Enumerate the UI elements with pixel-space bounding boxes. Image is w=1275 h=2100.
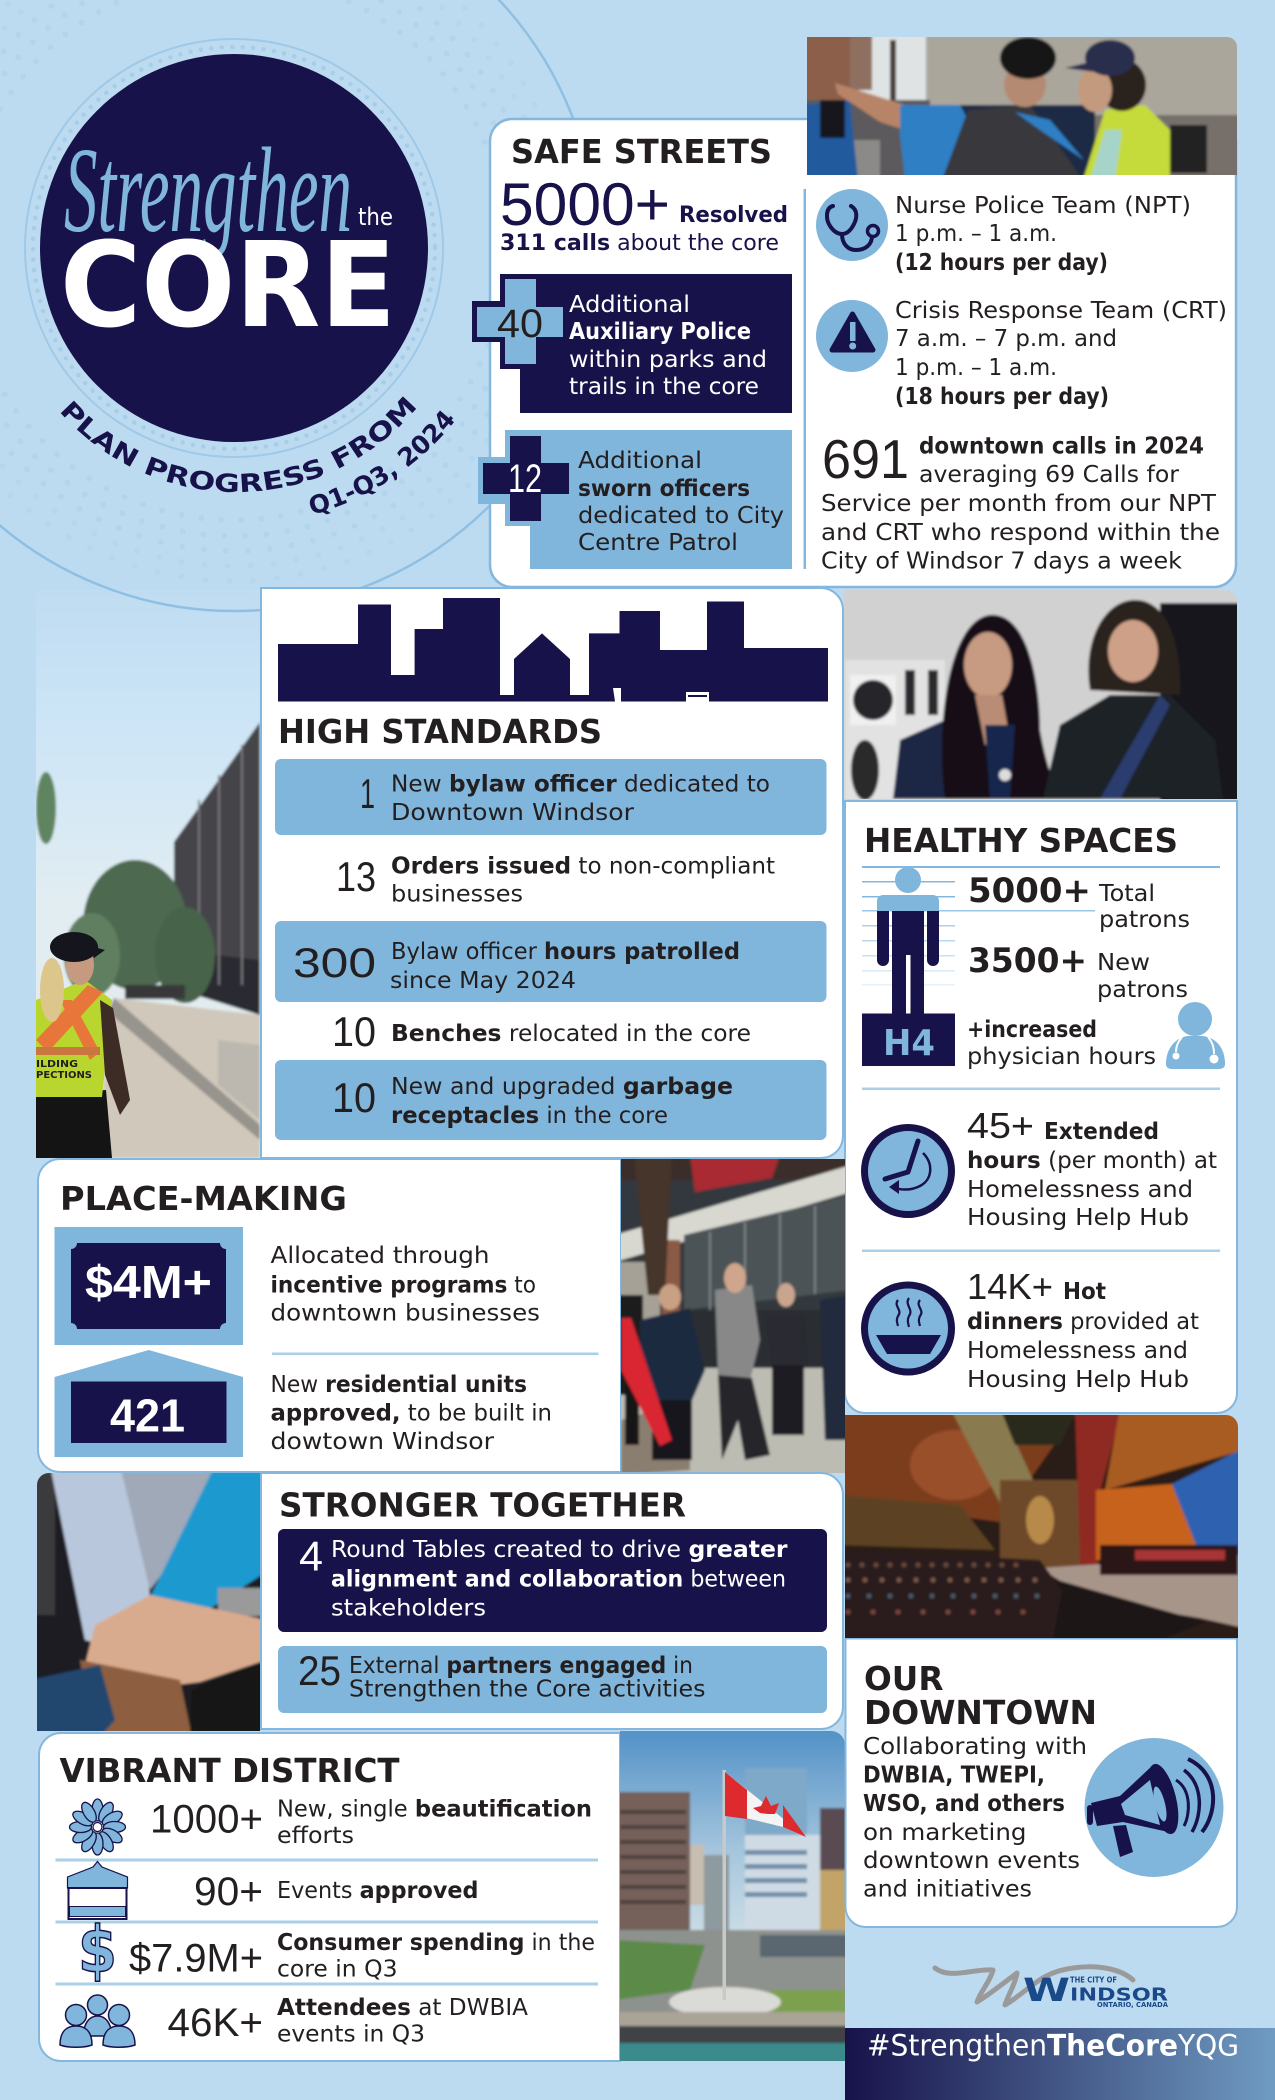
stat: 90+ events — [194, 1870, 478, 1914]
text: nurse police team: (12 hours per day) — [895, 250, 1108, 276]
stat: 46K+ attendees — [168, 1995, 528, 2048]
stat: $7.9M+ consumer spending: Consumer spending in the — [277, 1930, 595, 1956]
stat: 45+ extended hours: Homelessness and — [967, 1177, 1193, 1203]
stat: 3500+ new patrons: patrons — [1097, 977, 1188, 1003]
callout: 12 sworn officers: 12 — [508, 457, 542, 501]
photo: concert in theatre — [838, 1408, 1244, 1644]
vest lettering: ILDING — [36, 1059, 78, 1070]
callout: 12 sworn officers — [478, 430, 792, 569]
stat: 46K+ attendees: 46K+ — [168, 2001, 263, 2045]
callout: 4 round tables — [278, 1529, 827, 1632]
stat: $7.9M+ consumer spending: core in Q3 — [277, 1956, 398, 1982]
stat: 14K+ hot dinners: 14K+ — [967, 1266, 1053, 1307]
callout: 25 external partners — [278, 1646, 827, 1713]
callout: 12 sworn officers: sworn officers — [578, 476, 750, 502]
icon: alert triangle — [816, 300, 888, 372]
text: crisis response team: Crisis Response Team (CRT) — [895, 298, 1227, 324]
badge: 421 house: 421 — [110, 1390, 185, 1442]
stat: 14K+ hot dinners: Hot — [1063, 1279, 1106, 1305]
callout: 4 round tables: stakeholders — [331, 1596, 486, 1622]
logo: Strengthen the Core: Strengthen — [64, 123, 352, 258]
text: increased physician hours — [967, 1017, 1156, 1070]
stat: 691 downtown calls — [821, 428, 1220, 574]
photo: two nurses — [838, 584, 1243, 804]
graphic: city skyline — [278, 598, 828, 702]
callout: 12 sworn officers: Centre Patrol — [578, 530, 738, 556]
stat: 3500+ new patrons: New — [1097, 950, 1150, 976]
callout: 25 external partners: External partners engaged in — [349, 1653, 693, 1679]
icon: doctor — [1166, 1002, 1225, 1069]
callout: 40 auxiliary police: Auxiliary Police — [569, 319, 751, 345]
callout: 4 round tables: alignment and collaboration between — [331, 1566, 786, 1592]
text: incentive programs: downtown businesses — [270, 1300, 540, 1326]
stat: 691 downtown calls: Service per month from our NPT — [821, 491, 1217, 517]
stat: 1000+ beautification: efforts — [277, 1823, 354, 1849]
stat: 45+ extended hours: hours (per month) at — [967, 1148, 1217, 1174]
stat: 3500+ new patrons: 3500+ — [968, 941, 1087, 981]
heading: healthy spaces: HEALTHY SPACES — [864, 821, 1178, 860]
callout: 40 auxiliary police: within parks and — [569, 347, 767, 373]
text: collaborating — [863, 1734, 1087, 1902]
text: collaborating: Collaborating with — [863, 1734, 1087, 1760]
icon: stethoscope — [816, 189, 888, 261]
row: 1 bylaw officer — [275, 759, 826, 835]
curved subtitle: plan progress: Q1-Q3, 2024 — [310, 410, 454, 514]
callout: 40 auxiliary police — [472, 274, 792, 413]
stat: 3500+ new patrons — [968, 941, 1188, 1003]
row: 13 orders issued: 13 — [336, 853, 376, 900]
row: 13 orders issued — [336, 853, 775, 908]
photo: police officers — [807, 37, 1237, 175]
stat: 1000+ beautification: New, single beautification — [277, 1796, 592, 1822]
logo: City of Windsor — [935, 1967, 1169, 2009]
logo: City of Windsor: THE CITY OF — [1070, 1976, 1117, 1984]
row: 10 garbage receptacles — [275, 1060, 826, 1140]
text: residential units: dowtown Windsor — [270, 1429, 495, 1455]
stat: 5000+ resolved 311 calls — [500, 171, 788, 256]
heading: place-making: PLACE-MAKING — [60, 1179, 347, 1218]
text: increased physician hours: +increased — [967, 1017, 1097, 1043]
stat: 691 downtown calls: downtown calls in 2024 — [919, 434, 1204, 460]
stat: 5000+ total patrons: patrons — [1099, 907, 1190, 933]
heading: vibrant district: VIBRANT DISTRICT — [60, 1751, 400, 1790]
text: crisis response team: 7 a.m. – 7 p.m. and — [895, 326, 1117, 352]
decorative rings behind the logo — [0, 0, 597, 611]
panel: vibrant district — [39, 1733, 620, 2061]
heading: high standards: HIGH STANDARDS — [278, 712, 602, 751]
row: 300 hours patrolled: Bylaw officer hours patrolled — [391, 939, 740, 965]
panel: our downtown — [838, 1408, 1244, 1927]
vest lettering: PECTIONS — [36, 1070, 92, 1081]
stat: 1000+ beautification: 1000+ — [150, 1798, 263, 1842]
text: residential units: New residential units — [270, 1372, 527, 1398]
stat: 46K+ attendees: events in Q3 — [277, 2022, 425, 2048]
text: collaborating: on marketing — [863, 1820, 1026, 1846]
badge: $4M+ — [54, 1227, 243, 1345]
text: collaborating: WSO, and others — [863, 1791, 1065, 1817]
stat: 14K+ hot dinners — [967, 1266, 1199, 1393]
callout: 25 external partners: Strengthen the Core activities — [349, 1676, 706, 1702]
heading: our downtown: OUR — [864, 1659, 944, 1698]
vest lettering — [36, 1060, 92, 1078]
text: incentive programs — [270, 1243, 540, 1326]
row: 300 hours patrolled: since May 2024 — [390, 968, 576, 994]
callout: 40 auxiliary police: 40 — [497, 302, 543, 346]
heading: safe streets: SAFE STREETS — [511, 132, 772, 171]
callout: 40 auxiliary police: Additional — [569, 292, 690, 318]
row: 1 bylaw officer: Downtown Windsor — [391, 800, 635, 826]
text: residential units: approved, to be built in — [270, 1400, 552, 1426]
logo: City of Windsor: W — [1023, 1971, 1070, 2009]
footer: hashtag bar — [845, 2028, 1275, 2100]
stat: 14K+ hot dinners: dinners provided at — [967, 1309, 1199, 1335]
text: nurse police team: Nurse Police Team (NPT) — [895, 193, 1191, 219]
row: 1 bylaw officer: New bylaw officer dedicated to — [391, 772, 770, 798]
panel: healthy spaces — [838, 584, 1243, 1413]
graphic: height chart figure H4 — [862, 867, 1095, 1066]
photo: ribbon cutting — [615, 1150, 851, 1480]
logo: City of Windsor: ONTARIO, CANADA — [1097, 2001, 1169, 2009]
callout: 12 sworn officers: Additional — [578, 448, 702, 474]
stat: 14K+ hot dinners: Housing Help Hub — [967, 1367, 1189, 1393]
stat: 5000+ total patrons — [968, 871, 1190, 933]
stat: 45+ extended hours: 45+ — [967, 1105, 1034, 1146]
heading: our downtown: DOWNTOWN — [864, 1693, 1097, 1732]
row: 10 garbage receptacles: New and upgraded garbage — [391, 1074, 733, 1100]
photo: stacked hands — [37, 1473, 260, 1731]
logo: Strengthen the Core: the — [358, 203, 393, 231]
icon: megaphone — [1084, 1738, 1224, 1877]
row: 10 garbage receptacles: 10 — [332, 1074, 376, 1121]
callout: 4 round tables: Round Tables created to drive greater — [331, 1537, 788, 1563]
panel: high standards — [261, 588, 843, 1158]
text: collaborating: downtown events — [863, 1848, 1080, 1874]
row: 13 orders issued: Orders issued to non-compliant — [391, 854, 775, 880]
stat: $7.9M+ consumer spending: $7.9M+ — [129, 1936, 263, 1980]
panel: safe streets — [472, 30, 1245, 587]
callout: 4 round tables: 4 — [299, 1532, 323, 1580]
text: collaborating: and initiatives — [863, 1876, 1032, 1902]
badge: 421 house — [54, 1350, 243, 1457]
stat: 5000+ resolved 311 calls: Resolved — [679, 203, 788, 228]
graphic: height chart figure H4: H4 — [883, 1023, 935, 1064]
callout: 25 external partners: 25 — [298, 1647, 341, 1694]
text: incentive programs: Allocated through — [270, 1243, 490, 1269]
icon: dollar sign: $ — [78, 1914, 117, 1988]
stat: 45+ extended hours: Extended — [1044, 1119, 1159, 1145]
stat: 45+ extended hours: Housing Help Hub — [967, 1205, 1189, 1231]
stat: $7.9M+ consumer spending — [129, 1930, 595, 1982]
panel: stronger together — [261, 1473, 843, 1729]
stat: 90+ events: Events approved — [277, 1878, 478, 1904]
text: incentive programs: incentive programs to — [270, 1272, 536, 1298]
curved subtitle: plan progress: PLAN PROGRESS FROM — [60, 396, 416, 492]
heading: our downtown — [864, 1659, 1097, 1732]
callout: 12 sworn officers: dedicated to City — [578, 503, 784, 529]
icon: hot dinner bowl — [864, 1285, 952, 1372]
row: 300 hours patrolled: 300 — [293, 939, 376, 986]
text: nurse police team: 1 p.m. – 1 a.m. — [895, 221, 1057, 247]
footer: hashtag bar: #StrengthenTheCoreYQG — [867, 2028, 1239, 2062]
stat: 5000+ total patrons: 5000+ — [968, 871, 1091, 911]
heading: stronger together: STRONGER TOGETHER — [279, 1486, 686, 1524]
text: collaborating: DWBIA, TWEPI, — [863, 1762, 1045, 1788]
stat: 691 downtown calls: City of Windsor 7 days a week — [821, 548, 1183, 574]
stat: 5000+ resolved 311 calls: 5000+ — [500, 171, 670, 238]
photo: riverfront flag — [615, 1725, 851, 2067]
row: 1 bylaw officer: 1 — [360, 770, 375, 817]
badge: $4M+: $4M+ — [85, 1256, 212, 1308]
text: increased physician hours: physician hours — [967, 1044, 1156, 1070]
stat: 14K+ hot dinners: Homelessness and — [967, 1338, 1188, 1364]
icon: clock with extended hours — [864, 1128, 952, 1214]
stat: 5000+ total patrons: Total — [1098, 881, 1155, 907]
stat: 90+ events: 90+ — [194, 1870, 263, 1914]
text: crisis response team: 1 p.m. – 1 a.m. — [895, 355, 1057, 381]
text: nurse police team — [895, 193, 1191, 276]
row: 10 benches: Benches relocated in the core — [391, 1021, 751, 1047]
photo: bylaw officer on walkway — [36, 654, 260, 1158]
row: 10 benches: 10 — [332, 1008, 376, 1055]
stat: 45+ extended hours — [967, 1105, 1217, 1231]
icon: people group — [60, 1995, 135, 2047]
icon: flower — [70, 1799, 126, 1855]
text: crisis response team — [895, 298, 1227, 410]
stat: 46K+ attendees: Attendees at DWBIA — [277, 1995, 528, 2021]
logo: City of Windsor: INDSOR — [1070, 1984, 1168, 2006]
stat: 691 downtown calls: and CRT who respond within the — [821, 520, 1220, 546]
row: 13 orders issued: businesses — [391, 882, 523, 908]
row: 10 benches — [332, 1008, 751, 1055]
row: 300 hours patrolled — [275, 921, 826, 1002]
stat: 691 downtown calls: 691 — [822, 428, 909, 490]
logo: Strengthen the Core — [25, 39, 443, 457]
logo: Strengthen the Core: CORE — [60, 216, 396, 354]
row: 10 garbage receptacles: receptacles in the core — [391, 1103, 668, 1129]
text: residential units — [270, 1372, 552, 1455]
stat: 691 downtown calls: averaging 69 Calls for — [919, 462, 1180, 488]
callout: 40 auxiliary police: trails in the core — [569, 374, 759, 400]
text: crisis response team: (18 hours per day) — [895, 384, 1109, 410]
panel: place-making — [38, 1159, 621, 1472]
icon: event tent — [68, 1862, 128, 1919]
stat: 5000+ resolved 311 calls: 311 calls about the core — [500, 231, 779, 256]
stat: 1000+ beautification — [150, 1796, 592, 1849]
